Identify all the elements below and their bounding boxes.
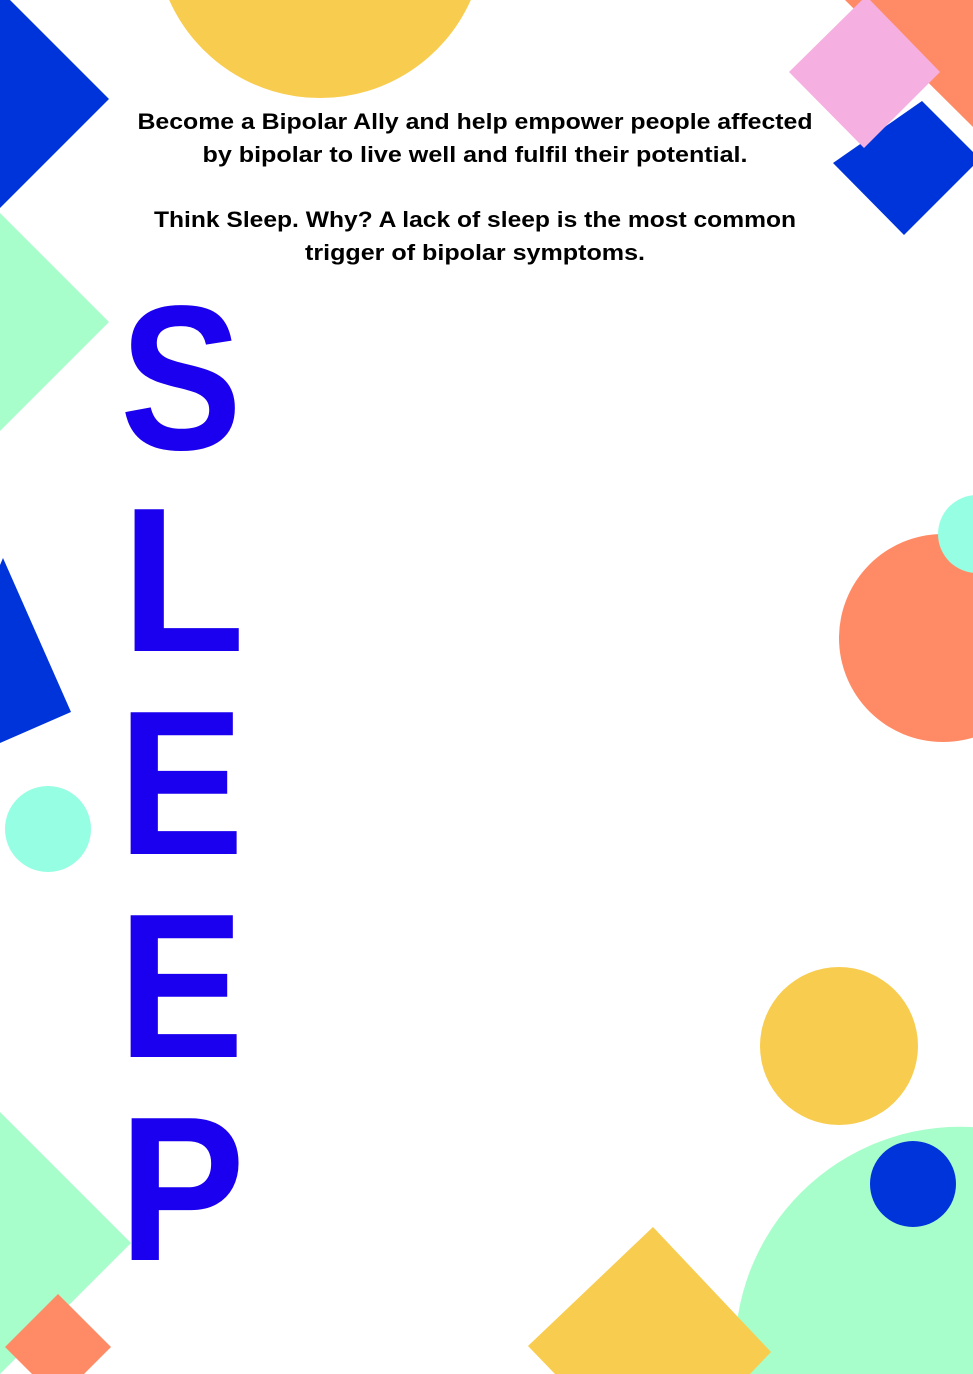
shape: top-left blue diamond [0, 0, 109, 208]
title: SLEEP vertical [118, 263, 245, 1304]
shape: bottom-left green diamond [0, 1112, 131, 1374]
shape: top yellow circle [169, 0, 471, 98]
title: SLEEP vertical: L [121, 465, 245, 695]
shape: left cyan circle [5, 786, 91, 872]
shape: top-right blue diamond [833, 101, 973, 235]
intro text: Become a Bipolar Ally and help empower people affected [138, 109, 812, 134]
shape: bottom yellow diamond [528, 1227, 771, 1374]
intro text: Think Sleep. Why? A lack of sleep is the most common [154, 207, 796, 232]
title: SLEEP vertical: E [118, 668, 244, 898]
shape: left blue triangle [0, 558, 71, 743]
shape: right cyan circle [938, 495, 973, 573]
shape: top-right pink diamond [789, 0, 940, 148]
shape: bottom-right green circle [735, 1127, 973, 1374]
shape: top-right orange band [845, 0, 973, 127]
title: SLEEP vertical: E [118, 871, 244, 1101]
shape: right orange circle [839, 534, 973, 742]
intro text: trigger of bipolar symptoms. [305, 240, 645, 265]
shape: left green diamond [0, 213, 109, 431]
title: SLEEP vertical: P [119, 1074, 245, 1304]
intro text [138, 109, 812, 265]
intro text: by bipolar to live well and fulfil their potential. [202, 142, 748, 167]
title: SLEEP vertical: S [120, 263, 242, 493]
shape: right yellow circle [760, 967, 918, 1125]
shape: bottom-left orange diamond [5, 1294, 111, 1374]
shape: bottom-right blue circle [870, 1141, 956, 1227]
